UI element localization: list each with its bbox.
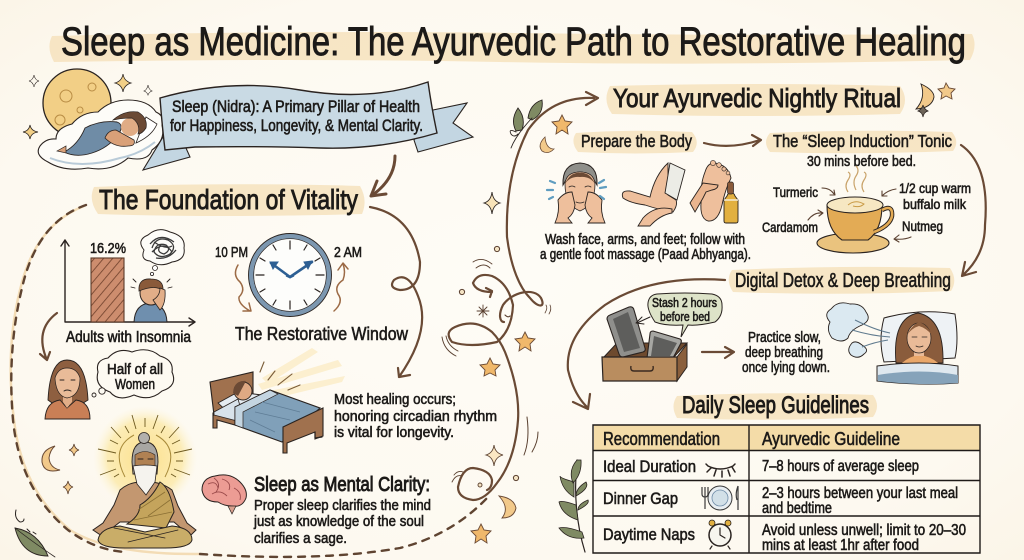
label: 10 PM (215, 245, 248, 261)
panel: sleep induction tonic (762, 131, 971, 253)
icon: breath clouds (827, 303, 890, 357)
bar chart: adults with insomnia (61, 240, 195, 346)
icon: corner leaf (15, 510, 55, 557)
heading: Sleep as Mental Clarity: (254, 474, 430, 496)
heading: the foundation of vitality: The Foundation of Vitality (99, 184, 358, 215)
row: daytime naps: Daytime Naps (603, 525, 695, 544)
arrow: insomnia to women (40, 313, 57, 360)
icon: sleeping woman (57, 112, 157, 155)
icon: oil bottle (724, 182, 738, 223)
heading: the restorative window: The Restorative Window (235, 324, 409, 344)
label: cardamom: Cardamom (762, 219, 818, 235)
arrow: squiggle down (235, 265, 251, 311)
header text: Recommendation (603, 428, 720, 449)
icon: sparkle (63, 481, 73, 494)
banner: sleep nidra: Sleep (Nidra): A Primary Pillar of Health (172, 98, 420, 116)
icon: foot massage (690, 160, 731, 221)
icon: drawer with devices (602, 307, 687, 381)
text: most healing occurs: is vital for longevity. (334, 424, 454, 441)
callout: half of all women (92, 350, 174, 398)
arrow: drawer to breathing (702, 347, 734, 358)
body (253, 497, 431, 547)
icon: brain (202, 475, 246, 514)
icon: star (552, 115, 572, 134)
icon: crescent moon (540, 137, 554, 153)
label: turmeric: Turmeric (773, 184, 818, 200)
table header (594, 426, 980, 450)
arrow: looping foundation to bed (370, 207, 422, 377)
header text (603, 428, 900, 449)
icon: star (471, 524, 491, 543)
row: ideal duration (603, 457, 919, 477)
header text: Ayurvedic Guideline (762, 428, 900, 449)
label: cardamom (762, 210, 823, 235)
text: most healing occurs: honoring circadian rhythm (334, 408, 497, 425)
heading: daily sleep guidelines: Daily Sleep Guidelines (682, 392, 869, 419)
icon: worry thought bubble (141, 230, 184, 276)
text: practice slow breathing: once lying down. (742, 360, 830, 376)
row: dinner gap: Dinner Gap (603, 489, 678, 508)
text: sleep as mental clarity (253, 474, 431, 547)
row: dinner gap: 2–3 hours between your last meal (762, 485, 958, 502)
arrow: banner to foundation (371, 156, 395, 196)
bar (91, 258, 124, 322)
axis label: Adults with Insomnia (66, 329, 191, 346)
row: daytime naps (603, 520, 966, 554)
body: clarifies a sage. (254, 530, 347, 547)
heading: your ayurvedic nightly ritual: Your Ayurvedic Nightly Ritual (613, 83, 901, 113)
decorative central swirl (442, 246, 551, 500)
caption (540, 232, 751, 263)
callout: stash 2 hours: Stash 2 hours (652, 295, 717, 310)
icon: meditating sage (93, 406, 197, 548)
icon: crescent moon (42, 446, 60, 471)
row: daytime naps: mins at least 1hr after food (762, 537, 919, 554)
row: dinner gap: and bedtime (762, 500, 832, 517)
row: daytime naps: Avoid unless unwell; limit to 20–30 (762, 522, 966, 539)
banner: sleep nidra: for Happiness, Longevity, & Mental Clarity. (170, 117, 423, 135)
caption: Wash face, arms, and feet; follow with (545, 232, 745, 248)
icon: washing face (547, 163, 606, 223)
icon: worried woman (45, 360, 90, 419)
icon: bed with sleeper (210, 348, 345, 453)
chart: clock restorative window (215, 234, 362, 316)
icon: washing arm (622, 163, 685, 226)
text: practice slow breathing: deep breathing (745, 345, 823, 361)
arrow: large curve to nightly ritual (500, 92, 598, 322)
icon: small sparkle (29, 75, 39, 87)
icon: phone (607, 307, 645, 357)
panel: prepare the body (540, 131, 751, 263)
body: Proper sleep clarifies the mind (254, 497, 431, 514)
label: buffalo milk (882, 180, 971, 212)
arrow: digital detox to guidelines (568, 279, 725, 409)
icon: star (515, 332, 535, 351)
callout: half of all women: Half of all (107, 361, 163, 378)
heading: Digital Detox & Deep Breathing (735, 270, 951, 292)
label: buffalo milk: buffalo milk (903, 196, 967, 212)
row: ideal duration: 7–8 hours of average sleep (762, 458, 919, 475)
arrow: tonic to digital detox (961, 145, 986, 276)
label: nutmeg (894, 218, 943, 242)
icon: woman in bed (877, 312, 958, 384)
dashed border path (11, 205, 488, 557)
sage body (93, 482, 196, 536)
icon: leaf sprig (559, 460, 588, 552)
label: nutmeg: Nutmeg (902, 218, 943, 234)
subheading: 30 mins before bed. (807, 154, 916, 170)
icon: leaves (510, 100, 542, 148)
callout: stash 2 hours: before bed (660, 309, 710, 324)
text: practice slow breathing (742, 330, 830, 376)
icon: crescent moon (916, 84, 934, 109)
banner: sleep nidra (143, 82, 473, 170)
row: ideal duration: Ideal Duration (603, 457, 696, 476)
icon: small sparkle (144, 85, 152, 95)
text: practice slow breathing: Practice slow, (748, 330, 821, 346)
icon: star (480, 358, 500, 376)
row: dinner gap (603, 485, 958, 517)
icon: sparkle (484, 192, 500, 214)
text: most healing occurs (334, 391, 497, 441)
sage head (132, 442, 158, 474)
icon: golden milk cup (817, 166, 892, 253)
heading: The “Sleep Induction” Tonic (773, 131, 952, 151)
sage legs (98, 526, 192, 548)
label: 2 AM (334, 245, 362, 261)
callout: stash 2 hours (636, 293, 722, 337)
value: 16.2% (90, 240, 126, 257)
callout: half of all women: Women (115, 376, 155, 393)
icon: sparkle (69, 444, 79, 456)
icon: sparkle (115, 74, 131, 92)
caption: a gentle foot massage (Paad Abhyanga). (540, 247, 751, 263)
icon: sparkle (918, 105, 928, 117)
heading: Prepare the Body (581, 131, 692, 151)
icon: moon and sleeper on cloud (38, 69, 163, 169)
icon: full moon (43, 69, 111, 137)
icon: sparkle (23, 125, 38, 139)
icon: tired man (131, 279, 172, 322)
icon: crescent moon (499, 496, 516, 518)
heading (729, 267, 954, 294)
panel: digital detox (602, 267, 958, 384)
table: daily sleep guidelines (593, 425, 980, 554)
icon: tablet (647, 331, 681, 358)
label: buffalo milk: 1/2 cup warm (899, 180, 971, 196)
arrow: squiggle up (334, 263, 348, 311)
body: just as knowledge of the soul (253, 513, 424, 530)
arrow: prepare to tonic (704, 135, 761, 146)
icon: star (938, 83, 955, 99)
text: most healing occurs: Most healing occurs; (334, 391, 456, 408)
icon: sparkle (486, 445, 503, 466)
